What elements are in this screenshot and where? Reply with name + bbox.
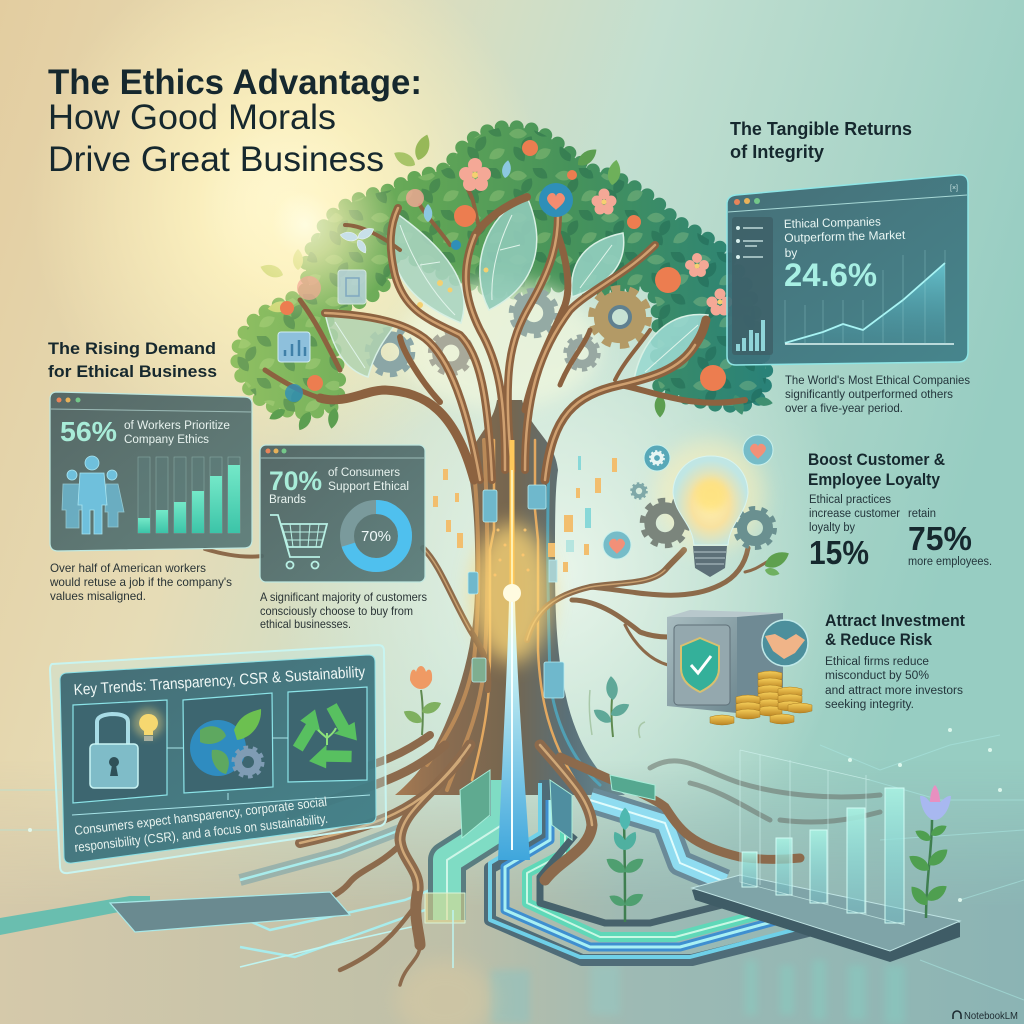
donut chart: 70% xyxy=(361,528,391,545)
statistic: 24.6% xyxy=(784,257,877,293)
panel text: Ethical Companies xyxy=(784,214,881,231)
glowing circuit base xyxy=(240,780,812,968)
text: investment note xyxy=(825,656,963,711)
gears xyxy=(368,289,648,374)
heading: loyalty xyxy=(808,450,945,489)
icon: safe with shield and coins xyxy=(667,610,812,725)
heading: rising demand: The Rising Demand xyxy=(48,339,216,358)
text: investment note: Ethical firms reduce xyxy=(825,656,929,668)
label: Brands xyxy=(269,494,306,506)
text: loyalty stats: more employees. xyxy=(908,556,992,568)
trunk body xyxy=(395,400,625,795)
icon: chart badge xyxy=(278,332,310,362)
outer circuit bands xyxy=(490,780,812,960)
panel text: by xyxy=(784,246,798,260)
heading: title: The Ethics Advantage: xyxy=(48,63,422,102)
text: workers note xyxy=(49,561,232,603)
panel text xyxy=(784,214,906,260)
icon: floating hearts xyxy=(603,435,773,559)
heading: title xyxy=(48,63,422,179)
heading: rising demand: for Ethical Business xyxy=(48,362,217,381)
text: loyalty stats: Ethical practices xyxy=(809,494,891,506)
glass root panels xyxy=(460,770,655,840)
heading: tangible returns: of Integrity xyxy=(730,142,824,162)
limbs xyxy=(205,548,770,690)
heading: tangible returns xyxy=(730,119,912,162)
text: market note xyxy=(785,373,970,415)
glowing centre stream xyxy=(433,440,617,860)
icon: document badge xyxy=(338,270,366,304)
stat: 70% xyxy=(269,466,322,496)
panel: market outperformance xyxy=(727,175,968,365)
glass bar chart platform xyxy=(692,750,960,962)
icon: padlock xyxy=(73,700,167,803)
text: workers note: would retuse a job if the company's xyxy=(49,575,232,589)
green band xyxy=(447,780,505,920)
text: market note: significantly outperformed others xyxy=(785,387,953,401)
heading: investment xyxy=(825,611,965,649)
label: of Consumers xyxy=(328,467,400,479)
heading: investment: & Reduce Risk xyxy=(825,630,932,649)
text: workers note: Over half of American workers xyxy=(50,561,206,575)
right band xyxy=(590,800,725,882)
text: market note: The World's Most Ethical Companies xyxy=(785,373,970,387)
stat: 56% xyxy=(60,416,117,447)
text: consumers note: consciously choose to buy from xyxy=(260,604,413,618)
panel: key trends xyxy=(50,645,386,873)
main branches xyxy=(265,190,745,480)
heading: investment: Attract Investment xyxy=(825,611,965,630)
NotebookLM badge: NotebookLM xyxy=(964,1010,1018,1022)
panel text: Consumers expect hansparency, corporate social xyxy=(74,794,328,838)
text: investment note: and attract more investors xyxy=(825,685,963,697)
panel: market outperformance: [×] xyxy=(950,185,958,192)
text: loyalty stats: retain xyxy=(908,508,936,520)
panel: workers xyxy=(50,392,252,551)
bar chart xyxy=(138,457,240,533)
tree canopy foliage xyxy=(237,127,773,433)
heading: title: Drive Great Business xyxy=(48,140,384,179)
text: consumers note: ethical businesses. xyxy=(260,617,351,631)
icon: coins xyxy=(710,671,812,725)
label: Support Ethical xyxy=(328,481,409,493)
roots xyxy=(280,735,880,985)
label xyxy=(124,420,230,446)
icon: lightbulb with gears xyxy=(603,435,792,577)
heading: rising demand xyxy=(48,339,217,381)
text: investment note: misconduct by 50% xyxy=(825,670,929,682)
icon: shopping cart xyxy=(270,515,327,568)
text: consumers note: A significant majority of customers xyxy=(260,590,427,604)
text: loyalty stats xyxy=(809,494,992,571)
text: consumers note xyxy=(260,590,427,631)
sun glow over foliage xyxy=(210,130,400,320)
sidebar xyxy=(732,217,773,355)
panel text: Outperform the Market xyxy=(784,228,906,245)
text: loyalty stats: increase customer xyxy=(809,508,900,520)
heading: tangible returns: The Tangible Returns xyxy=(730,119,912,139)
label: Company Ethics xyxy=(124,434,209,446)
tree trunk and branches xyxy=(205,190,770,795)
heading: title: How Good Morals xyxy=(48,98,336,137)
icon: workers xyxy=(62,456,124,534)
text: loyalty stats: 15% xyxy=(809,534,869,571)
icon: globe and gear xyxy=(183,693,273,793)
panel text: responsibility (CSR), and a focus on sustainability. xyxy=(74,811,329,855)
text: loyalty stats: 75% xyxy=(908,520,972,557)
text: market note: over a five-year period. xyxy=(785,401,903,415)
panel title: Key Trends: Transparency, CSR & Sustainability xyxy=(73,664,366,699)
line chart xyxy=(785,250,954,344)
plants xyxy=(604,785,951,922)
fruits and flowers xyxy=(278,140,732,402)
glass leaves xyxy=(325,197,708,380)
heading: loyalty: Employee Loyalty xyxy=(808,470,940,489)
text: workers note: values misaligned. xyxy=(50,589,146,603)
text: loyalty stats: loyalty by xyxy=(809,522,855,534)
icon: recycling xyxy=(285,687,367,782)
small plants xyxy=(401,666,645,738)
panel: consumers xyxy=(260,445,425,582)
donut chart xyxy=(347,507,405,565)
text: investment note: seeking integrity. xyxy=(825,699,914,711)
icon: handshake xyxy=(762,620,808,666)
icon: pale leaves xyxy=(340,225,376,255)
platform left xyxy=(0,892,350,935)
label: of Workers Prioritize xyxy=(124,420,230,432)
heading: loyalty: Boost Customer & xyxy=(808,450,945,469)
label xyxy=(269,467,409,506)
